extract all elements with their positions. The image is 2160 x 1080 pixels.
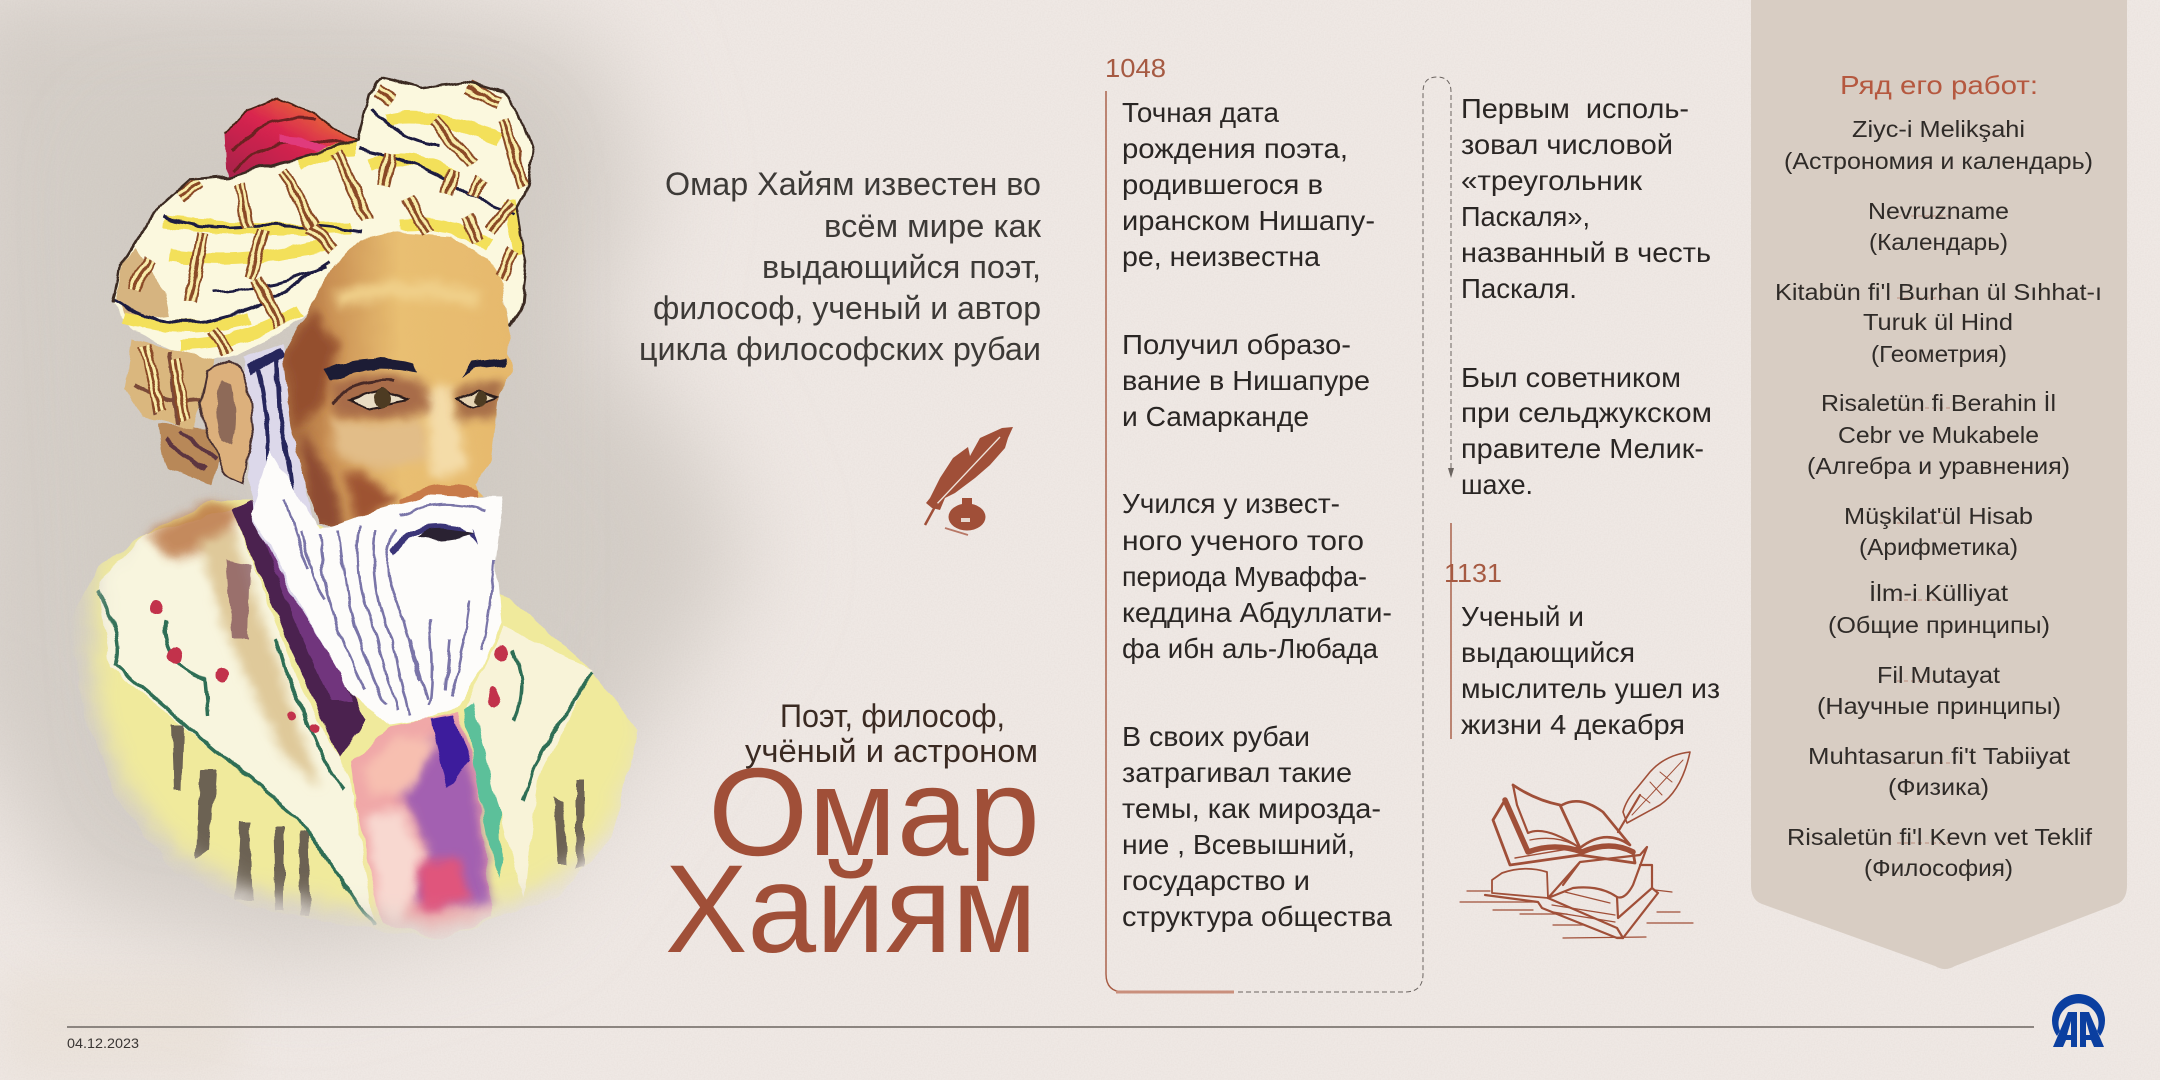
- works list text: Fil Mutayat: [1877, 662, 2001, 688]
- works list text: (Геометрия): [1871, 341, 2007, 367]
- panel heading: Ряд его работ:: [1840, 70, 2038, 100]
- subtitle: [745, 698, 1038, 769]
- left column text: вание в Нишапуре: [1122, 365, 1370, 396]
- date: 04.12.2023: [67, 1035, 139, 1051]
- intro text: философ, ученый и автор: [653, 290, 1041, 326]
- left column text: структура общества: [1122, 901, 1392, 932]
- works list text: Ziyc-i Melikşahi: [1852, 116, 2025, 142]
- left column text: темы, как мирозда-: [1122, 793, 1381, 824]
- works list text: Müşkilat'ül Hisab: [1844, 503, 2033, 529]
- left column text: родившегося в: [1122, 169, 1323, 200]
- right column text: «треугольник: [1461, 165, 1643, 196]
- right column text: шахе.: [1461, 469, 1533, 500]
- works list text: [1775, 116, 2102, 881]
- red cap: [225, 98, 357, 177]
- works list text: (Физика): [1888, 774, 1989, 800]
- death text: выдающийся: [1461, 637, 1635, 668]
- year 1048: 1048: [1105, 53, 1166, 83]
- year 1131: 1131: [1444, 558, 1502, 588]
- left column text: Учился у извест-: [1122, 488, 1340, 519]
- subtitle: Поэт, философ,: [780, 698, 1005, 734]
- works list text: Cebr ve Mukabele: [1838, 422, 2039, 448]
- lower turban wrap: [125, 338, 215, 430]
- ear: [200, 360, 253, 483]
- works list text: (Арифметика): [1859, 534, 2018, 560]
- title: Омар: [708, 743, 1040, 882]
- works list text: (Общие принципы): [1828, 612, 2050, 638]
- left column text: периода Муваффа-: [1122, 561, 1367, 592]
- left column text: В своих рубаи: [1122, 721, 1310, 752]
- turban: [112, 78, 533, 420]
- scarf: [351, 713, 492, 940]
- hair: [243, 343, 345, 680]
- subtitle: учёный и астроном: [745, 733, 1038, 769]
- right column text: названный в честь: [1461, 237, 1711, 268]
- works list text: Risaletün fi Berahin İl: [1821, 390, 2056, 416]
- logo: AA: [2052, 994, 2105, 1047]
- footer line: [67, 1026, 2034, 1028]
- death text: Ученый и: [1461, 601, 1584, 632]
- death text: жизни 4 декабря: [1461, 709, 1685, 740]
- death text: мыслитель ушел из: [1461, 673, 1720, 704]
- title: [665, 743, 1040, 979]
- portrait of Omar Khayyam: [71, 78, 638, 940]
- left column text: затрагивал такие: [1122, 757, 1352, 788]
- icon: feather and inkwell: [925, 427, 1013, 535]
- right column text: Паскаля.: [1461, 273, 1577, 304]
- left column text: Получил образо-: [1122, 329, 1351, 360]
- left column text: ного ученого того: [1122, 525, 1364, 556]
- robe: [71, 500, 638, 940]
- timeline frame: [1106, 77, 1454, 992]
- death text: [1461, 601, 1720, 740]
- works list text: İlm-i Külliyat: [1869, 580, 2009, 606]
- left column text: фа ибн аль-Любада: [1122, 633, 1378, 664]
- works list text: Kitabün fi'l Burhan ül Sıhhat-ı: [1775, 279, 2102, 305]
- works list text: (Календарь): [1869, 229, 2008, 255]
- right column text: при сельджукском: [1461, 397, 1712, 428]
- works list text: Turuk ül Hind: [1863, 309, 2013, 335]
- works list text: (Философия): [1864, 855, 2013, 881]
- right column text: [1461, 93, 1712, 500]
- right column text: Первым исполь-: [1461, 93, 1689, 124]
- works list text: Risaletün fi'l Kevn vet Teklif: [1787, 824, 2093, 850]
- works list text: (Астрономия и календарь): [1784, 148, 2093, 174]
- right column text: правителе Мелик-: [1461, 433, 1704, 464]
- left column text: кеддина Абдуллати-: [1122, 597, 1392, 628]
- left column text: рождения поэта,: [1122, 133, 1348, 164]
- title: Хайям: [665, 840, 1037, 979]
- works list text: (Алгебра и уравнения): [1807, 453, 2070, 479]
- works list text: (Научные принципы): [1817, 693, 2061, 719]
- right column text: Был советником: [1461, 362, 1681, 393]
- works list text: Nevruzname: [1868, 198, 2009, 224]
- icon: books and quill: [1460, 752, 1693, 938]
- intro text: Омар Хайям известен во: [665, 166, 1041, 202]
- left column text: ре, неизвестна: [1122, 241, 1320, 272]
- panel: works list: [1751, 0, 2127, 969]
- back wrap: [158, 425, 225, 485]
- beard: [251, 450, 502, 725]
- intro text: выдающийся поэт,: [762, 249, 1041, 285]
- left column text: [1122, 97, 1392, 932]
- left column text: и Самарканде: [1122, 401, 1309, 432]
- left column text: ние , Всевышний,: [1122, 829, 1355, 860]
- left column text: государство и: [1122, 865, 1310, 896]
- left column text: иранском Нишапу-: [1122, 205, 1375, 236]
- right column text: зовал числовой: [1461, 129, 1673, 160]
- right column text: Паскаля»,: [1461, 201, 1590, 232]
- face: [282, 231, 514, 526]
- intro text: [639, 166, 1042, 367]
- intro text: цикла философских рубаи: [639, 331, 1041, 367]
- works list text: Muhtasarun fi't Tabiiyat: [1808, 743, 2071, 769]
- turban cloth: [112, 78, 533, 360]
- left column text: Точная дата: [1122, 97, 1279, 128]
- collars: [98, 510, 374, 927]
- intro text: всём мире как: [824, 208, 1042, 244]
- dark inner band: [232, 500, 366, 757]
- turban stripes: [133, 87, 523, 420]
